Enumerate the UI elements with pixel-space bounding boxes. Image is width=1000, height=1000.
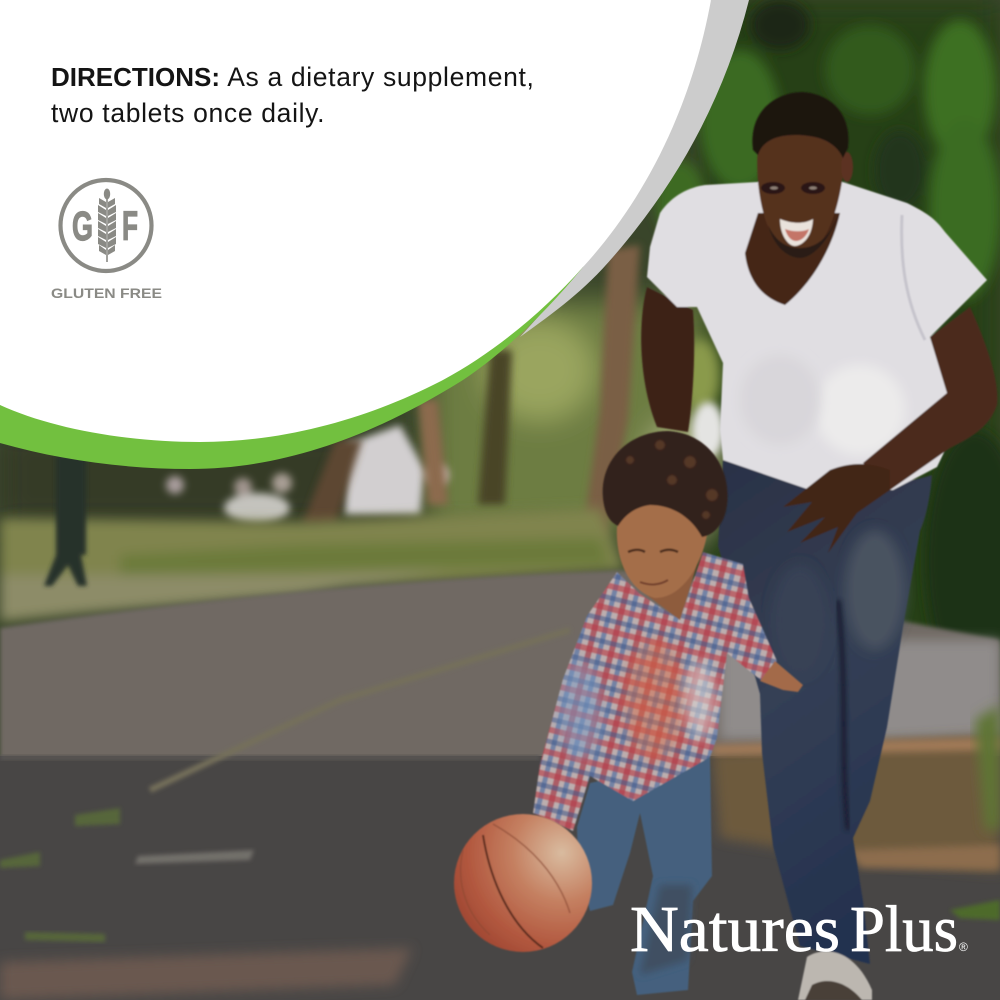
road (0, 570, 1000, 1000)
icon: gluten free badge: G (72, 203, 93, 249)
boy hand (760, 661, 803, 692)
boy neck (640, 555, 700, 620)
logo: Natures Plus: ® (959, 940, 968, 954)
father ear (841, 152, 853, 182)
icon: gluten free badge: F (122, 203, 138, 249)
lamp post (44, 455, 87, 586)
boy hair (603, 431, 728, 537)
directions text (51, 62, 534, 128)
father smile (780, 219, 813, 246)
boy (520, 431, 803, 995)
father hand (783, 464, 890, 553)
directions text: two tablets once daily. (51, 98, 325, 128)
father neck and chest (745, 213, 840, 305)
father (641, 92, 997, 1000)
wheat stalk (98, 188, 116, 262)
father left arm (641, 287, 694, 432)
father jeans (718, 460, 932, 964)
father shoe (798, 951, 872, 1000)
green swoosh (0, 267, 583, 469)
gluten free label: GLUTEN FREE (51, 285, 162, 301)
father eyes (761, 182, 825, 194)
grey swoosh (520, 0, 749, 337)
grass strip (0, 508, 625, 622)
father face (757, 133, 846, 257)
boy face (617, 505, 707, 598)
foliage (655, 0, 1000, 690)
basketball (454, 814, 592, 952)
father right arm (863, 307, 997, 490)
white panel (0, 0, 711, 442)
father t-shirt (647, 182, 987, 490)
logo: Natures Plus (630, 895, 968, 965)
boy jeans (577, 757, 712, 995)
icon: gluten free badge (51, 178, 162, 301)
father hair (752, 92, 849, 158)
boy plaid shirt (532, 552, 778, 832)
directions text: DIRECTIONS: As a dietary supplement, (51, 62, 534, 92)
